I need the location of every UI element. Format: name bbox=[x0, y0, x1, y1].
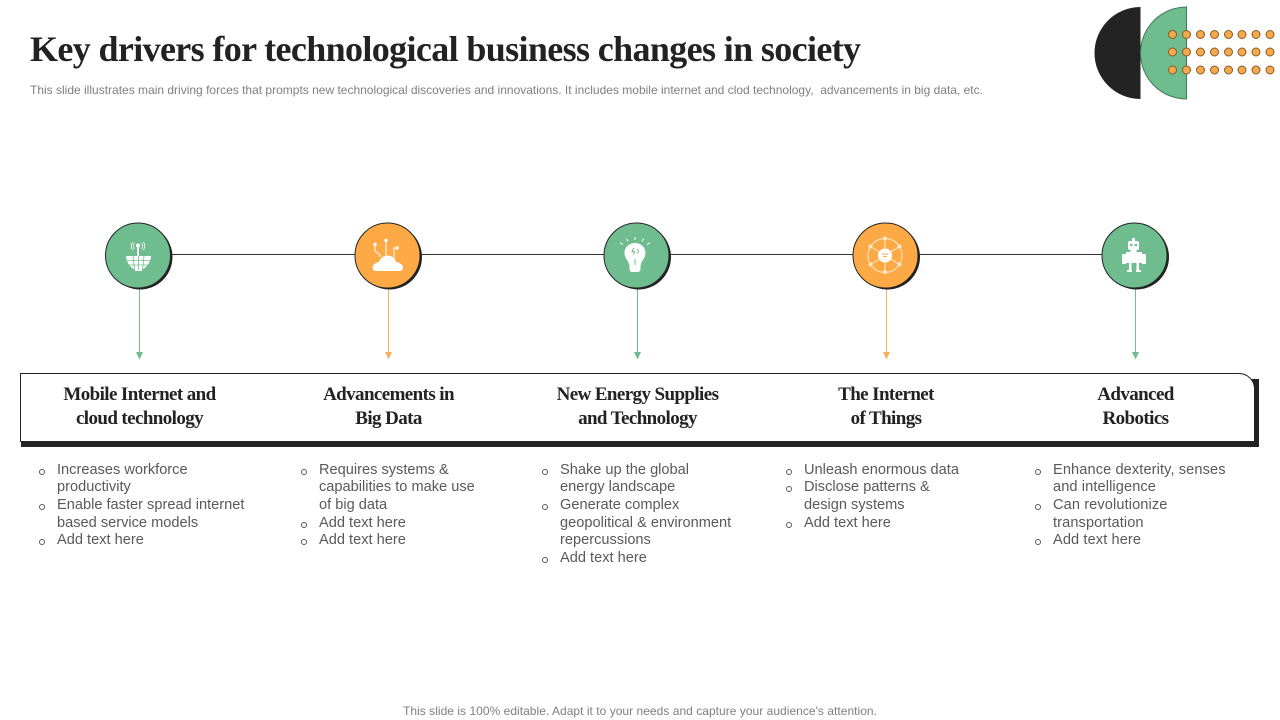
text block: robotics bullets: Enhance dexterity, senses bbox=[1053, 462, 1226, 478]
text block: internet of things bullets bbox=[786, 462, 959, 531]
text block: mobile internet bullets: based service models bbox=[57, 515, 198, 531]
text block: big data bullets: of big data bbox=[319, 497, 387, 513]
heading: mobile internet: Mobile Internet and bbox=[63, 384, 216, 405]
footer note: This slide is 100% editable. Adapt it to your needs and capture your audience's attention. bbox=[403, 704, 877, 718]
text block: internet of things bullets: design systems bbox=[804, 497, 905, 513]
text block: mobile internet bullets bbox=[39, 462, 244, 548]
text block: energy bullets: Shake up the global bbox=[560, 462, 689, 478]
text block: mobile internet bullets: productivity bbox=[57, 479, 131, 495]
text block: big data bullets: Add text here bbox=[319, 515, 406, 531]
subtitle: This slide illustrates main driving forces that prompts new technological discoveries and innovations. It includes mobile internet and clod technology, advancements in big data, etc. bbox=[30, 83, 983, 97]
heading: robotics: Advanced bbox=[1097, 384, 1174, 405]
icon: internet of things network bbox=[853, 223, 920, 290]
text block: energy bullets: geopolitical & environment bbox=[560, 515, 731, 531]
text block: energy bullets: repercussions bbox=[560, 532, 651, 548]
arrow: energy bbox=[634, 288, 641, 360]
icon: big data cloud bbox=[355, 223, 422, 290]
text block: mobile internet bullets: Add text here bbox=[57, 532, 144, 548]
text block: energy bullets: Generate complex bbox=[560, 497, 679, 513]
heading: robotics: Robotics bbox=[1103, 408, 1168, 428]
heading: new energy: New Energy Supplies bbox=[557, 384, 718, 405]
text block: big data bullets: Requires systems & bbox=[319, 462, 449, 478]
decoration: semicircles and dots bbox=[1094, 6, 1274, 100]
icon: robot bbox=[1102, 223, 1169, 290]
timeline with icons and arrows bbox=[105, 222, 1169, 360]
text block: internet of things bullets: Disclose patterns & bbox=[804, 479, 930, 495]
heading: internet of things bbox=[838, 384, 934, 428]
arrow: mobile internet bbox=[136, 288, 143, 360]
arrow: robotics bbox=[1132, 288, 1139, 360]
text block: mobile internet bullets: Increases workforce bbox=[57, 462, 188, 478]
text block: internet of things bullets: Add text here bbox=[804, 515, 891, 531]
heading: big data: Advancements in bbox=[323, 384, 454, 405]
text block: robotics bullets bbox=[1035, 462, 1226, 548]
arrow: internet of things bbox=[883, 288, 890, 360]
heading: big data bbox=[323, 384, 454, 428]
text block: robotics bullets: and intelligence bbox=[1053, 479, 1156, 495]
text block: mobile internet bullets: Enable faster spread internet bbox=[57, 497, 244, 513]
text block: robotics bullets: Add text here bbox=[1053, 532, 1141, 548]
text block: energy bullets bbox=[542, 462, 732, 566]
heading: new energy bbox=[557, 384, 719, 428]
text block: robotics bullets: Can revolutionize bbox=[1053, 497, 1167, 513]
heading: big data: Big Data bbox=[355, 408, 422, 428]
heading: robotics bbox=[1097, 384, 1174, 428]
heading: mobile internet: cloud technology bbox=[76, 408, 203, 428]
text block: big data bullets: capabilities to make use bbox=[319, 479, 475, 495]
heading: internet of things: The Internet bbox=[838, 384, 934, 405]
heading band bbox=[20, 373, 1259, 447]
heading: mobile internet bbox=[63, 384, 216, 428]
icon: light bulb bbox=[604, 223, 671, 290]
heading: new energy: and Technology bbox=[578, 408, 697, 428]
icon: mobile internet dish bbox=[106, 223, 172, 290]
text block: internet of things bullets: Unleash enormous data bbox=[804, 462, 959, 478]
title: Key drivers for technological business changes in society bbox=[30, 29, 860, 69]
heading: internet of things: of Things bbox=[851, 408, 921, 428]
arrow: big data bbox=[385, 288, 392, 360]
text block: energy bullets: energy landscape bbox=[560, 479, 675, 495]
text block: big data bullets: Add text here bbox=[319, 532, 406, 548]
text block: robotics bullets: transportation bbox=[1053, 515, 1144, 531]
text block: big data bullets bbox=[301, 462, 475, 548]
text block: energy bullets: Add text here bbox=[560, 550, 647, 566]
